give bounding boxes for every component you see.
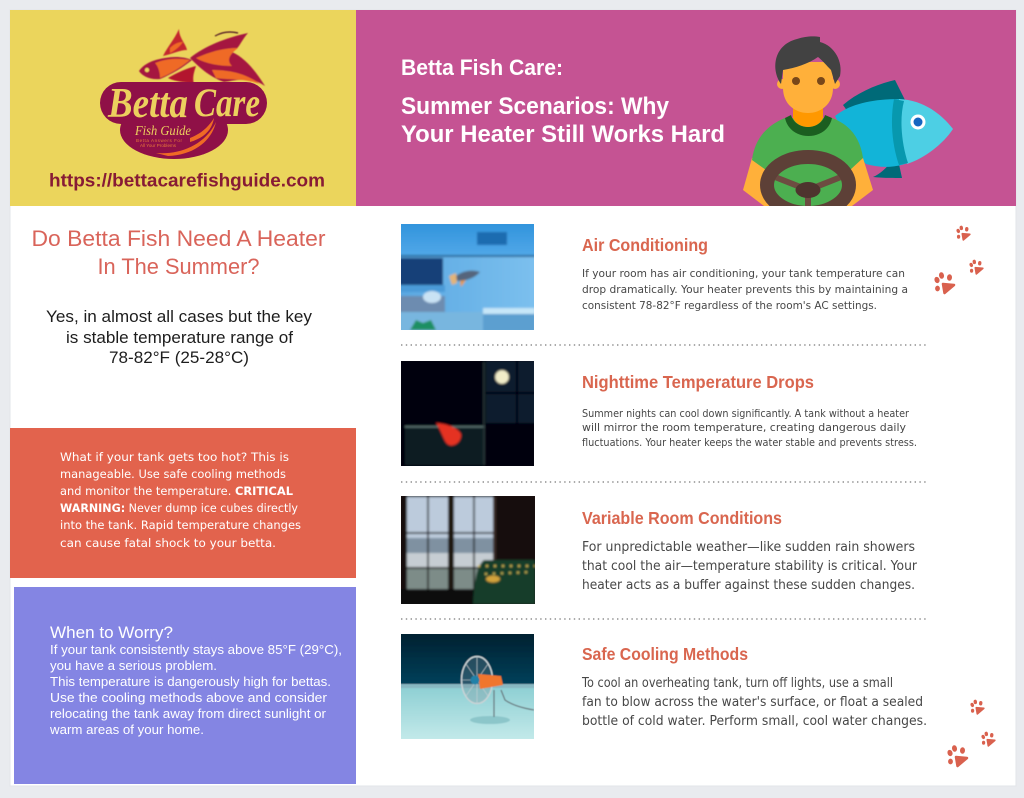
section: safe cooling methods [581, 644, 927, 729]
heading: Air Conditioning [582, 235, 708, 255]
eyes [792, 77, 825, 85]
logo badge: Betta [107, 81, 188, 127]
body text: heater acts as a buffer against these sudden changes. [582, 578, 915, 593]
worry text: If your tank consistently stays above 85°F (29°C), [50, 643, 342, 657]
title: Your Heater Still Works Hard [401, 121, 725, 148]
body text [582, 408, 917, 449]
heading: In The Summer? [98, 254, 260, 279]
body text: fan to blow across the water's surface, or float a sealed [582, 695, 923, 710]
neck [793, 108, 823, 127]
warning text: manageable. Use safe cooling methods [60, 467, 286, 481]
photo: window with variable weather [399, 494, 537, 606]
worry text [49, 643, 342, 737]
body text: bottle of cold water. Perform small, cool water changes. [582, 714, 927, 729]
panel: too hot warning [10, 428, 356, 578]
title: Summer Scenarios: Why [401, 93, 669, 120]
body text: that cool the air—temperature stability is critical. Your [582, 559, 918, 574]
warning text: What if your tank gets too hot? This is [60, 450, 289, 464]
body text [582, 267, 908, 312]
answer text: Yes, in almost all cases but the key [46, 307, 312, 326]
photo: fan cooling tank [399, 632, 536, 741]
icon: paw prints bottom [947, 699, 995, 766]
worry heading: When to Worry? [50, 624, 173, 642]
warning text: can cause fatal shock to your betta. [60, 536, 276, 550]
logo fish fins [139, 29, 265, 86]
answer text [46, 307, 312, 367]
title: Betta Fish Care: [401, 55, 563, 80]
photo: betta in air conditioned room [399, 222, 536, 332]
section: air conditioning [582, 235, 908, 312]
body text: drop dramatically. Your heater prevents this by maintaining a [582, 283, 908, 296]
warning text: and monitor the temperature. CRITICAL [60, 484, 294, 498]
body text: To cool an overheating tank, turn off lights, use a small [581, 676, 893, 691]
worry text: Use the cooling methods above and consider [50, 691, 327, 705]
panel: logo header [10, 10, 356, 206]
heading [32, 226, 326, 279]
title [401, 55, 725, 148]
body text: For unpredictable weather—like sudden rain showers [582, 540, 915, 555]
worry text: you have a serious problem. [50, 659, 217, 673]
panel: summer heater question [32, 226, 326, 367]
wheel [767, 157, 849, 213]
head [777, 62, 840, 113]
worry text: warm areas of your home. [49, 723, 204, 737]
warning text [60, 450, 301, 550]
logo badge: Fish Guide [134, 124, 191, 139]
icon: paw prints top [934, 225, 983, 293]
arms [743, 158, 873, 206]
warning text: WARNING: Never dump ice cubes directly [60, 501, 298, 515]
body text [581, 676, 927, 729]
body text: will mirror the room temperature, creating dangerous daily [582, 422, 906, 434]
warning text: into the tank. Rapid temperature changes [60, 518, 301, 532]
website url: https://bettacarefishguide.com [49, 170, 325, 190]
photo: betta at night [399, 359, 536, 468]
worry text: This temperature is dangerously high for bettas. [50, 675, 331, 689]
logo badge [100, 80, 267, 159]
answer text: 78-82°F (25-28°C) [109, 348, 249, 367]
logo badge: Betta Answers For [136, 138, 182, 143]
worry text: relocating the tank away from direct sunlight or [50, 707, 326, 721]
body text: Summer nights can cool down significantly. A tank without a heater [582, 408, 910, 420]
answer text: is stable temperature range of [66, 328, 293, 347]
logo fish body [139, 57, 192, 79]
icon: betta care logo [100, 29, 267, 159]
logo badge: All Your Problems [140, 143, 177, 148]
shirt [752, 118, 863, 206]
panel: when to worry [14, 587, 356, 784]
panel: title header [356, 10, 1016, 213]
body text [582, 540, 918, 593]
body text: If your room has air conditioning, your tank temperature can [582, 267, 905, 280]
body text: fluctuations. Your heater keeps the water stable and prevents stress. [582, 437, 917, 449]
heading: Safe Cooling Methods [582, 644, 748, 664]
icon: fish [835, 80, 953, 178]
logo badge: Care [194, 80, 260, 125]
heading: Variable Room Conditions [582, 508, 782, 528]
heading: Nighttime Temperature Drops [582, 372, 814, 392]
section: nighttime temperature drops [582, 372, 917, 449]
heading: Do Betta Fish Need A Heater [32, 226, 326, 251]
hair [775, 36, 841, 84]
section: variable room conditions [582, 508, 918, 593]
body text: consistent 78-82°F regardless of the room's AC settings. [582, 299, 877, 312]
icon: driver with steering wheel [743, 36, 873, 213]
